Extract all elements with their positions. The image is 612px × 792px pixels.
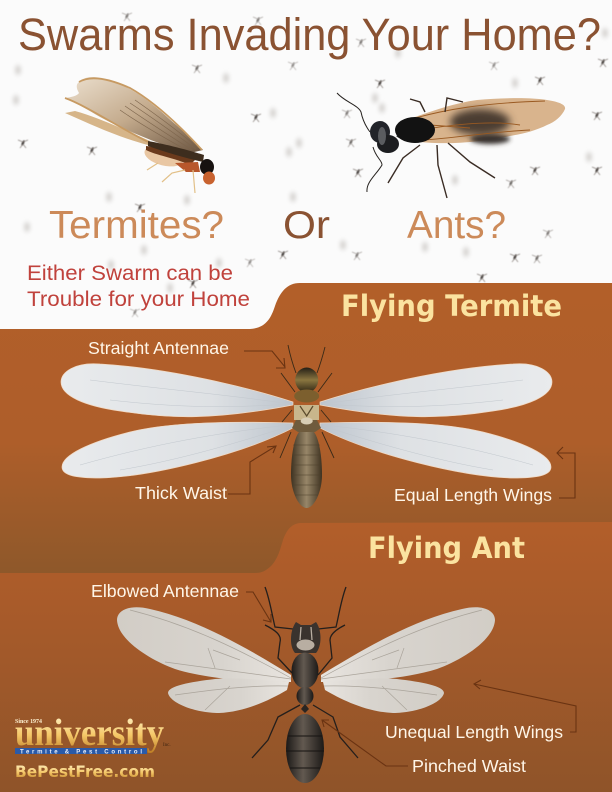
callout: straight antennae: Straight Antennae: [88, 338, 229, 358]
callout: pinched waist: [322, 720, 526, 776]
top photo background with swarm: [0, 0, 612, 340]
photo: flying ant: [337, 93, 565, 198]
warning text: Trouble for your Home: [27, 287, 250, 311]
ant body: [286, 622, 324, 783]
callout: equal length wings: [394, 447, 575, 505]
brown background panel with termite tab: [0, 283, 612, 792]
university logo: Since 1974: [15, 718, 43, 725]
warning text: [27, 261, 250, 311]
university logo: Termite & Pest Control: [20, 750, 142, 756]
heading: flying ant: Flying Ant: [368, 531, 525, 565]
ant antennae and legs: [252, 587, 358, 758]
callout: straight antennae: [88, 338, 285, 368]
website: BePestFree.com: [15, 762, 155, 781]
question: termites: Termites?: [49, 204, 224, 247]
heading: flying termite: Flying Termite: [341, 289, 562, 323]
warning text: Either Swarm can be: [27, 261, 233, 285]
photo: flying termite: [65, 77, 215, 193]
callout: thick waist: [135, 446, 276, 503]
or: Or: [283, 204, 330, 247]
callout: unequal length wings: [385, 680, 576, 742]
university logo: Inc.: [163, 743, 171, 748]
callout: thick waist: Thick Waist: [135, 483, 227, 503]
callout: elbowed antennae: [91, 581, 271, 622]
callout: unequal length wings: Unequal Length Wings: [385, 722, 563, 742]
termite antennae and legs: [280, 345, 334, 458]
callout: pinched waist: Pinched Waist: [412, 756, 526, 776]
flying termite illustration: [61, 345, 552, 508]
callout: equal length wings: Equal Length Wings: [394, 485, 552, 505]
termite body: [291, 368, 322, 508]
ant wings: [117, 607, 495, 713]
callout: elbowed antennae: Elbowed Antennae: [91, 581, 239, 601]
termite wings: [61, 364, 552, 478]
flying ant illustration: [117, 587, 495, 783]
university logo: university: [15, 712, 164, 754]
title: Swarms Invading Your Home?: [18, 9, 601, 60]
flying ant tab and lower panel: [0, 522, 612, 792]
question: ants: Ants?: [407, 204, 506, 247]
